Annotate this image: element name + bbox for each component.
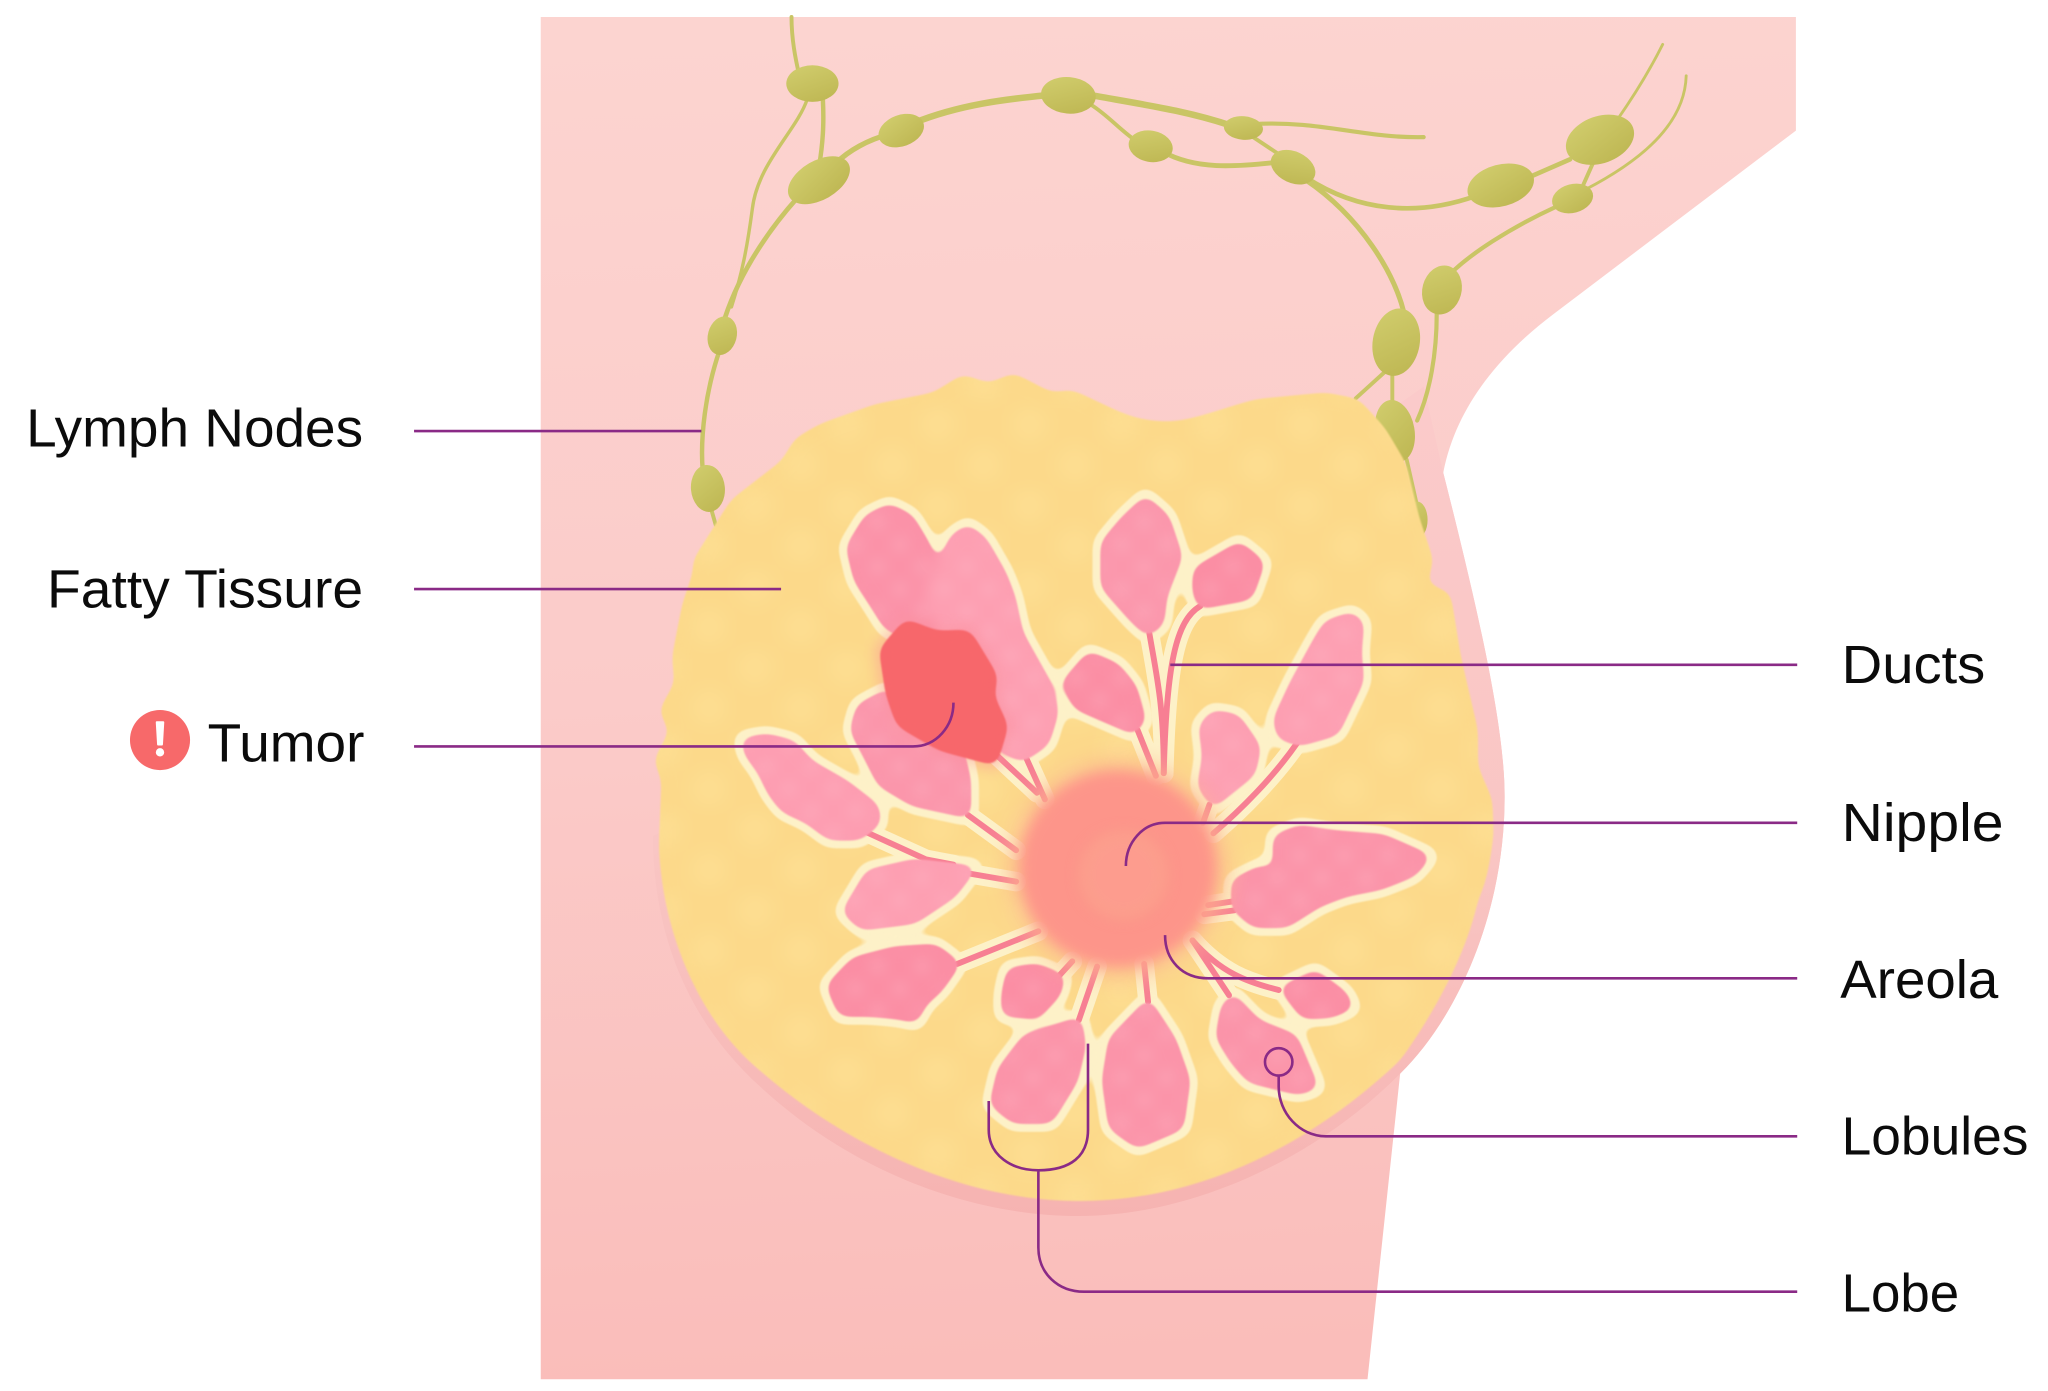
lobule marker circle	[1265, 1048, 1292, 1076]
lobe outlines	[744, 499, 1428, 1145]
duct halos	[866, 606, 1297, 1020]
lobe: upper left dark	[849, 507, 947, 640]
nipple	[1084, 836, 1162, 914]
leader: lymph nodes	[414, 430, 701, 432]
lobe: far left	[744, 737, 878, 837]
tumor	[883, 623, 1004, 761]
leader: areola	[1165, 935, 1797, 978]
lobe: top center	[1104, 499, 1179, 633]
leader: nipple	[1126, 823, 1797, 866]
label: Tumor: Tumor	[208, 714, 364, 773]
lobe: small lower left	[1004, 967, 1062, 1016]
lymphatic vessels	[702, 17, 1686, 525]
lobe: left of center	[1064, 654, 1143, 731]
lobe: bottom center	[1105, 1002, 1187, 1145]
leader: ducts	[1170, 664, 1797, 666]
lobes with lobules	[744, 499, 1428, 1145]
lobe: right middle	[1234, 828, 1428, 925]
lobe: top small right	[1195, 545, 1262, 606]
lobe: right center	[1200, 713, 1258, 805]
leader: lobe with bracket	[989, 1044, 1797, 1292]
lobe: small lower right	[1283, 973, 1351, 1016]
label: Areola: Areola	[1840, 951, 1999, 1010]
lobe: bottom left	[993, 1020, 1083, 1121]
icon: warning	[130, 710, 190, 770]
lobe: upper right tall	[1276, 615, 1361, 743]
label: Nipple: Nipple	[1842, 794, 2004, 853]
lobe: below tumor	[853, 692, 968, 815]
label: Lymph Nodes: Lymph Nodes	[26, 400, 363, 459]
fatty tissue	[654, 374, 1493, 1200]
lobe: upper left light	[926, 528, 1055, 759]
lobe: lower left	[829, 947, 957, 1020]
lymph nodes	[689, 65, 1641, 538]
label: Lobules: Lobules	[1842, 1108, 2028, 1167]
leader: fatty tissue	[414, 588, 781, 590]
lobe: left middle	[845, 862, 973, 927]
breast shadow band	[653, 387, 1505, 1216]
ducts	[866, 606, 1297, 1020]
areola	[1008, 759, 1228, 978]
label: Fatty Tissure: Fatty Tissure	[47, 560, 363, 619]
label: Ducts: Ducts	[1842, 636, 1985, 695]
leader: lobules	[1279, 1076, 1797, 1136]
leader: tumor	[414, 703, 953, 746]
body background	[541, 17, 1796, 1379]
label: Lobe: Lobe	[1842, 1264, 1959, 1323]
leader lines	[414, 431, 1797, 1292]
lobe: bottom right	[1219, 997, 1315, 1092]
